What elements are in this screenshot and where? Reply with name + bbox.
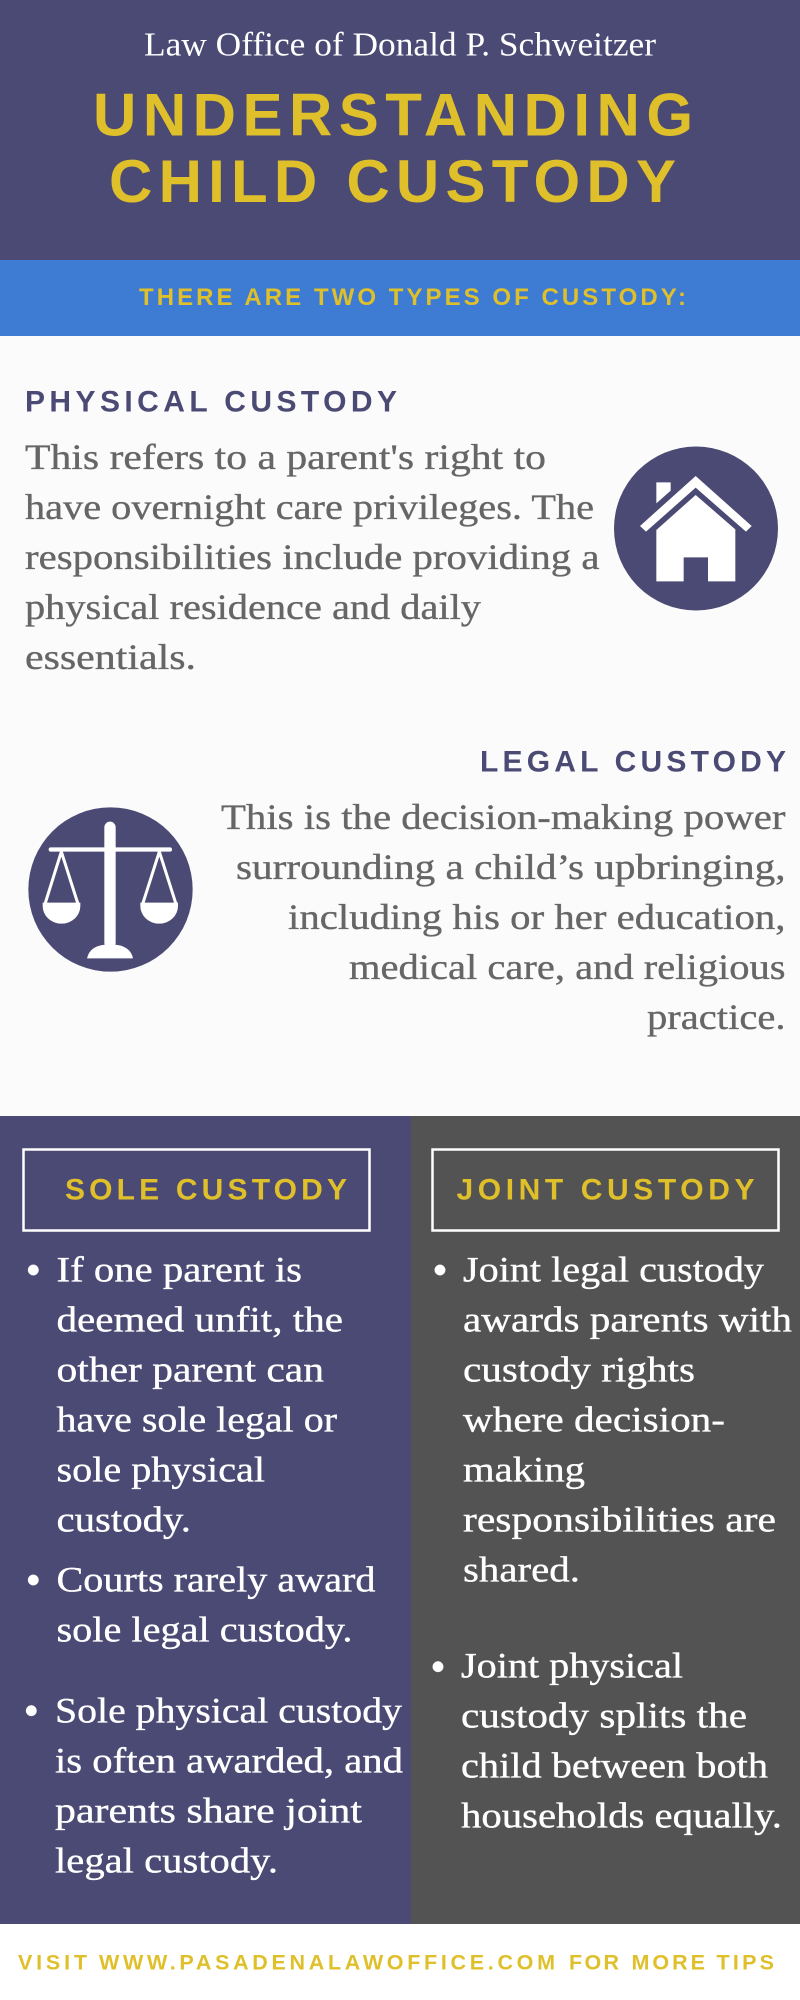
footer call to action [18,1950,774,1974]
heading box: sole custody [24,1150,370,1230]
text: physical custody description: physical residence and daily [25,587,481,627]
firm name: Law Office of Donald P. Schweitzer [144,26,657,64]
bullet list: joint custody: Joint physical [461,1646,683,1686]
text: legal custody description [221,797,786,1037]
bullet list: joint custody [433,1250,792,1836]
bullet list: sole custody: deemed unfit, the [56,1300,343,1340]
bullet list: sole custody: Courts rarely award [56,1560,376,1600]
bullet list: sole custody: parents share joint [55,1791,362,1831]
title: UNDERSTANDING [93,82,693,148]
footer call to action: VISIT [18,1950,87,1974]
bullet list: joint custody: shared. [463,1550,580,1590]
heading: legal custody: LEGAL CUSTODY [480,746,786,779]
bullet list: sole custody: custody. [56,1500,191,1540]
bullet list: joint custody: custody rights [463,1350,695,1390]
icon: house [614,446,778,610]
bullet list: joint custody: child between both [461,1746,768,1786]
bullet list: joint custody: custody splits the [461,1696,747,1736]
heading: physical custody: PHYSICAL CUSTODY [25,386,397,419]
bullet list: joint custody: where decision- [463,1400,725,1440]
bullet list: joint custody: Joint legal custody [463,1250,764,1290]
panel: header [0,0,800,260]
footer call to action: WWW.PASADENALAWOFFICE.COM [99,1950,555,1974]
text: legal custody description: This is the decision-making power [221,797,786,837]
text: physical custody description: This refers to a parent's right to [25,437,546,477]
bullet list: joint custody: responsibilities are [463,1500,776,1540]
text: physical custody description [25,437,600,677]
title: CHILD CUSTODY [109,148,676,215]
bullet list: joint custody: awards parents with [463,1300,792,1340]
text: physical custody description: responsibilities include providing a [25,537,600,577]
bullet list: sole custody: Sole physical custody [55,1691,402,1731]
bullet list: sole custody [26,1250,403,1881]
title [93,82,693,215]
text: legal custody description: including his or her education, [288,897,786,937]
bullet list: sole custody: is often awarded, and [55,1741,403,1781]
bullet list: sole custody: sole physical [56,1450,265,1490]
footer call to action: MORE [632,1950,705,1974]
heading box: sole custody: SOLE CUSTODY [65,1173,347,1206]
band heading: THERE ARE TWO TYPES OF CUSTODY: [139,284,686,311]
bullet list: joint custody: households equally. [461,1796,782,1836]
text: legal custody description: practice. [647,997,786,1037]
panel: subtitle band [0,260,800,336]
heading box: joint custody [432,1150,778,1230]
panel: joint custody [411,1116,800,1924]
bullet list: sole custody: have sole legal or [56,1400,337,1440]
text: physical custody description: essentials. [25,637,196,677]
text: physical custody description: have overnight care privileges. The [25,487,594,527]
bullet list: sole custody: legal custody. [55,1841,278,1881]
panel: custody definitions [0,336,800,1116]
bullet list: sole custody: sole legal custody. [56,1610,352,1650]
footer call to action: FOR [569,1950,619,1974]
panel: sole custody [0,1116,411,1924]
icon: scales of justice [28,807,193,972]
text: legal custody description: medical care, and religious [349,947,786,987]
heading box: joint custody: JOINT CUSTODY [456,1173,754,1206]
text: legal custody description: surrounding a child’s upbringing, [236,847,786,887]
bullet list: sole custody: other parent can [56,1350,324,1390]
bullet list: sole custody: If one parent is [56,1250,302,1290]
footer call to action: TIPS [716,1950,774,1974]
bullet list: joint custody: making [463,1450,585,1490]
